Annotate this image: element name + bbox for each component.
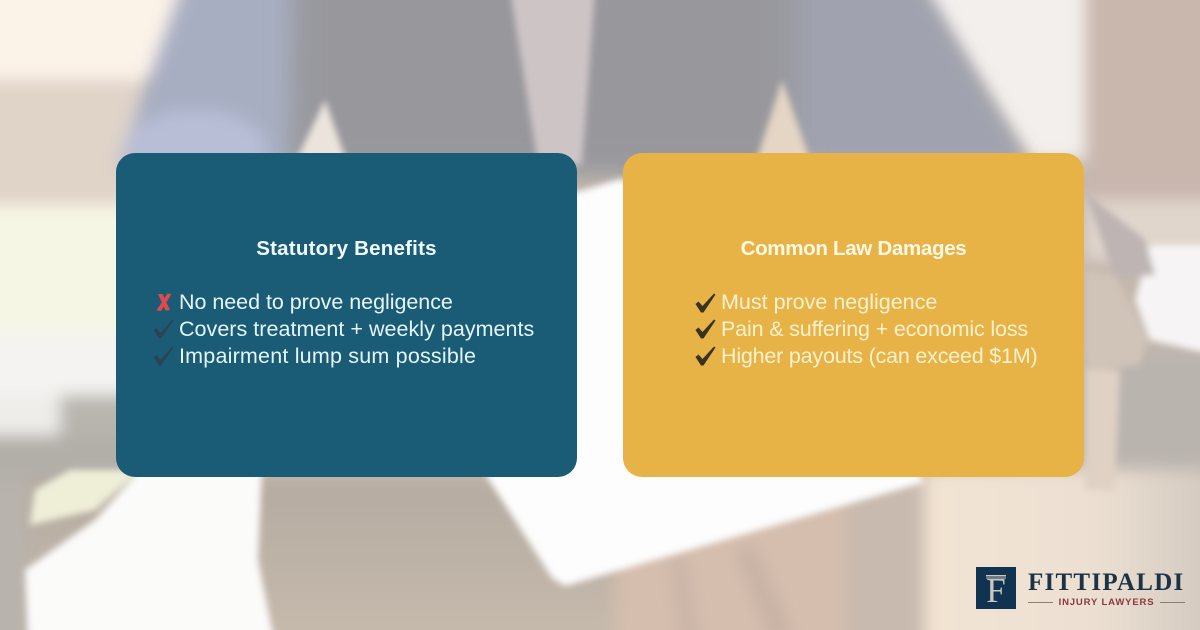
paper in the middle — [487, 179, 925, 586]
text: no need to prove negligence: No need to prove negligence — [179, 290, 453, 314]
text: pain and suffering: Pain & suffering + economic loss — [721, 317, 1028, 341]
jacket sleeves — [118, 0, 1030, 165]
heading: statutory benefits: Statutory Benefits — [256, 237, 437, 260]
text: impairment lump sum: Impairment lump sum possible — [179, 344, 476, 368]
icon: check — [696, 346, 716, 366]
bottom table — [0, 480, 650, 630]
fingers — [735, 545, 795, 630]
icon: red cross — [156, 294, 172, 311]
crumpled paper — [25, 470, 274, 630]
icon: check — [154, 320, 174, 338]
left wall — [0, 0, 220, 80]
right wall — [1085, 0, 1200, 210]
panel: common law damages — [623, 153, 1084, 477]
text: must prove negligence: Must prove negligence — [721, 290, 937, 314]
logo tagline: INJURY LAWYERS — [1059, 597, 1154, 608]
logo: fittipaldi injury lawyers — [976, 567, 1185, 609]
text: covers treatment: Covers treatment + weekly payments — [179, 317, 534, 341]
logo mark — [976, 567, 1016, 609]
logo name: FITTIPALDI — [1028, 569, 1185, 596]
right arm and sheet — [1135, 245, 1200, 355]
heading: common law damages: Common Law Damages — [741, 237, 966, 260]
jacket centre — [295, 0, 795, 175]
icon: check — [696, 320, 716, 338]
panel: statutory benefits — [116, 153, 577, 477]
white wall behind — [905, 0, 1085, 160]
logo mark: F — [986, 571, 1006, 609]
icon: check — [696, 294, 716, 312]
icon: check — [154, 346, 174, 366]
list: statutory benefits — [154, 290, 534, 368]
text: higher payouts: Higher payouts (can exceed $1M) — [721, 344, 1037, 368]
list: common law damages — [696, 290, 1037, 368]
shirt strip — [510, 0, 595, 165]
notches — [294, 100, 348, 165]
